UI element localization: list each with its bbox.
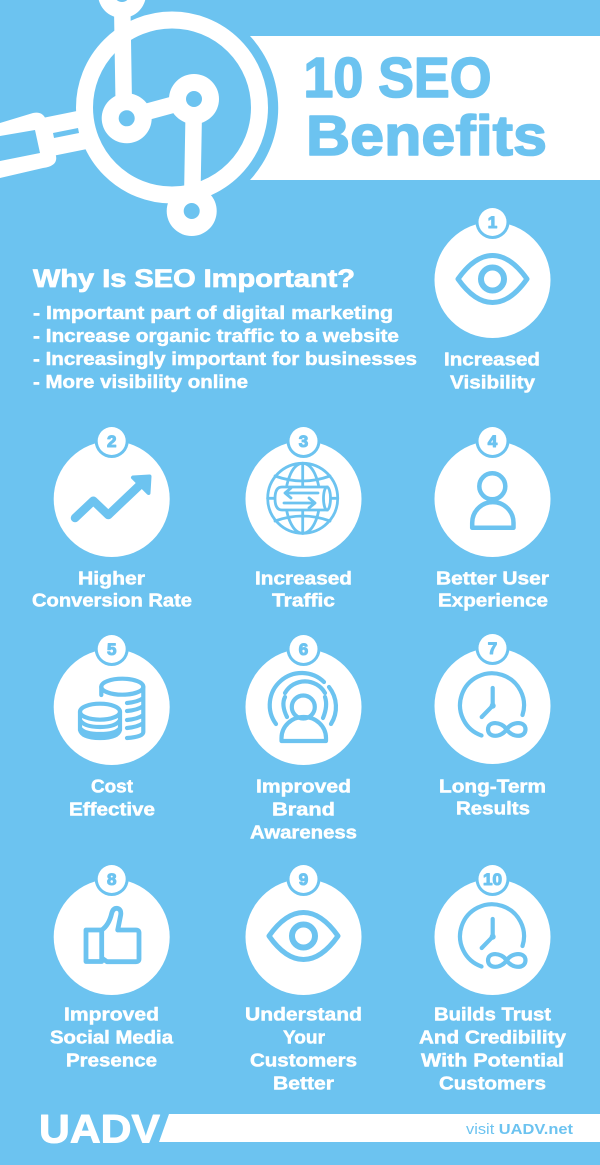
number badge 7 [476,631,510,665]
label [444,348,540,392]
benefit 5: cost effective [54,632,170,820]
number badge 4 [476,424,510,458]
label: Awareness [250,822,357,842]
number badge 8: 8 [107,870,116,889]
number badge 10: 10 [483,870,502,889]
icon: thumbs up [86,908,139,962]
icon: coin stacks [80,679,143,738]
number badge 6: 6 [299,640,308,659]
label [436,568,549,610]
intro bullets: - Increasingly important for businesses [33,348,417,369]
label [255,568,352,610]
label: Long-Term [439,776,546,796]
label: With Potential [421,1050,564,1070]
label: Brand [272,798,335,820]
label: Better User [436,568,549,588]
number badge 9 [286,862,320,896]
label: Social Media [50,1026,174,1048]
footer link: visit UADV.net [466,1121,573,1138]
benefit 10: builds trust and credibility [419,862,567,1094]
number badge 6 [286,632,320,666]
icon: globe with traffic arrows [268,463,338,533]
label: Effective [69,798,155,820]
label: Improved [64,1004,159,1024]
title text: 10 SEO [304,46,492,110]
label: Results [456,798,530,818]
intro bullets: - Increase organic traffic to a website [33,325,399,346]
icon: person with signal arcs [270,673,336,741]
intro bullets: - More visibility online [33,371,248,392]
benefit 1: increased visibility [434,205,550,392]
benefit 9: understand your customers better [245,862,362,1094]
label: Cost [91,776,133,796]
label: Visibility [450,372,536,392]
benefit 8: improved social media presence [50,862,174,1070]
label: Conversion Rate [32,590,192,610]
number badge 9: 9 [299,870,308,889]
footer bar [39,1108,600,1152]
label: Improved [256,776,351,796]
number badge 1 [476,205,510,239]
label: Higher [78,568,145,588]
number badge 8 [95,862,129,896]
label: Presence [66,1050,157,1070]
title banner [250,36,600,180]
label [32,568,192,610]
number badge 5 [95,632,129,666]
number badge 10 [476,862,510,896]
number badge 2 [95,424,129,458]
benefit 4: better user experience [434,424,550,610]
benefit 3: increased traffic [246,424,362,610]
benefit 7: long-term results [434,631,550,818]
footer logo: UADV [39,1108,160,1152]
label: Experience [438,590,548,610]
number badge 1: 1 [488,213,497,232]
icon: rising arrow [75,476,150,518]
label [50,1004,174,1070]
label: Customers [439,1072,546,1094]
icon: clock with infinity [460,904,526,967]
benefit 2: higher conversion rate [32,424,192,610]
label: Traffic [272,590,335,610]
label: Your [283,1026,325,1048]
label [419,1004,567,1094]
benefit 6: improved brand awareness [246,632,362,842]
label: Better [273,1072,334,1094]
title text [304,46,547,168]
label: Customers [250,1050,357,1070]
icon: eye [458,256,527,302]
icon: magnifying glass with network nodes [0,0,260,236]
number badge 7: 7 [488,639,497,658]
label: Increased [255,568,352,588]
intro bullets: - Important part of digital marketing [33,302,393,323]
label [439,776,546,818]
icon: eye [269,912,338,960]
icon: clock with infinity [460,673,526,736]
number badge 2: 2 [107,432,116,451]
number badge 3: 3 [299,432,308,451]
number badge 5: 5 [107,640,116,659]
label: Builds Trust [434,1004,551,1024]
icon: user [472,473,514,528]
label: Understand [245,1004,362,1024]
label: Increased [444,348,540,370]
label [250,776,357,842]
label [69,776,155,820]
label: And Credibility [419,1026,567,1048]
title text: Benefits [306,104,547,168]
intro text block [33,265,417,392]
label [245,1004,362,1094]
number badge 4: 4 [488,432,498,451]
intro heading: Why Is SEO Important? [33,265,355,293]
intro bullets [33,302,417,392]
number badge 3 [286,424,320,458]
